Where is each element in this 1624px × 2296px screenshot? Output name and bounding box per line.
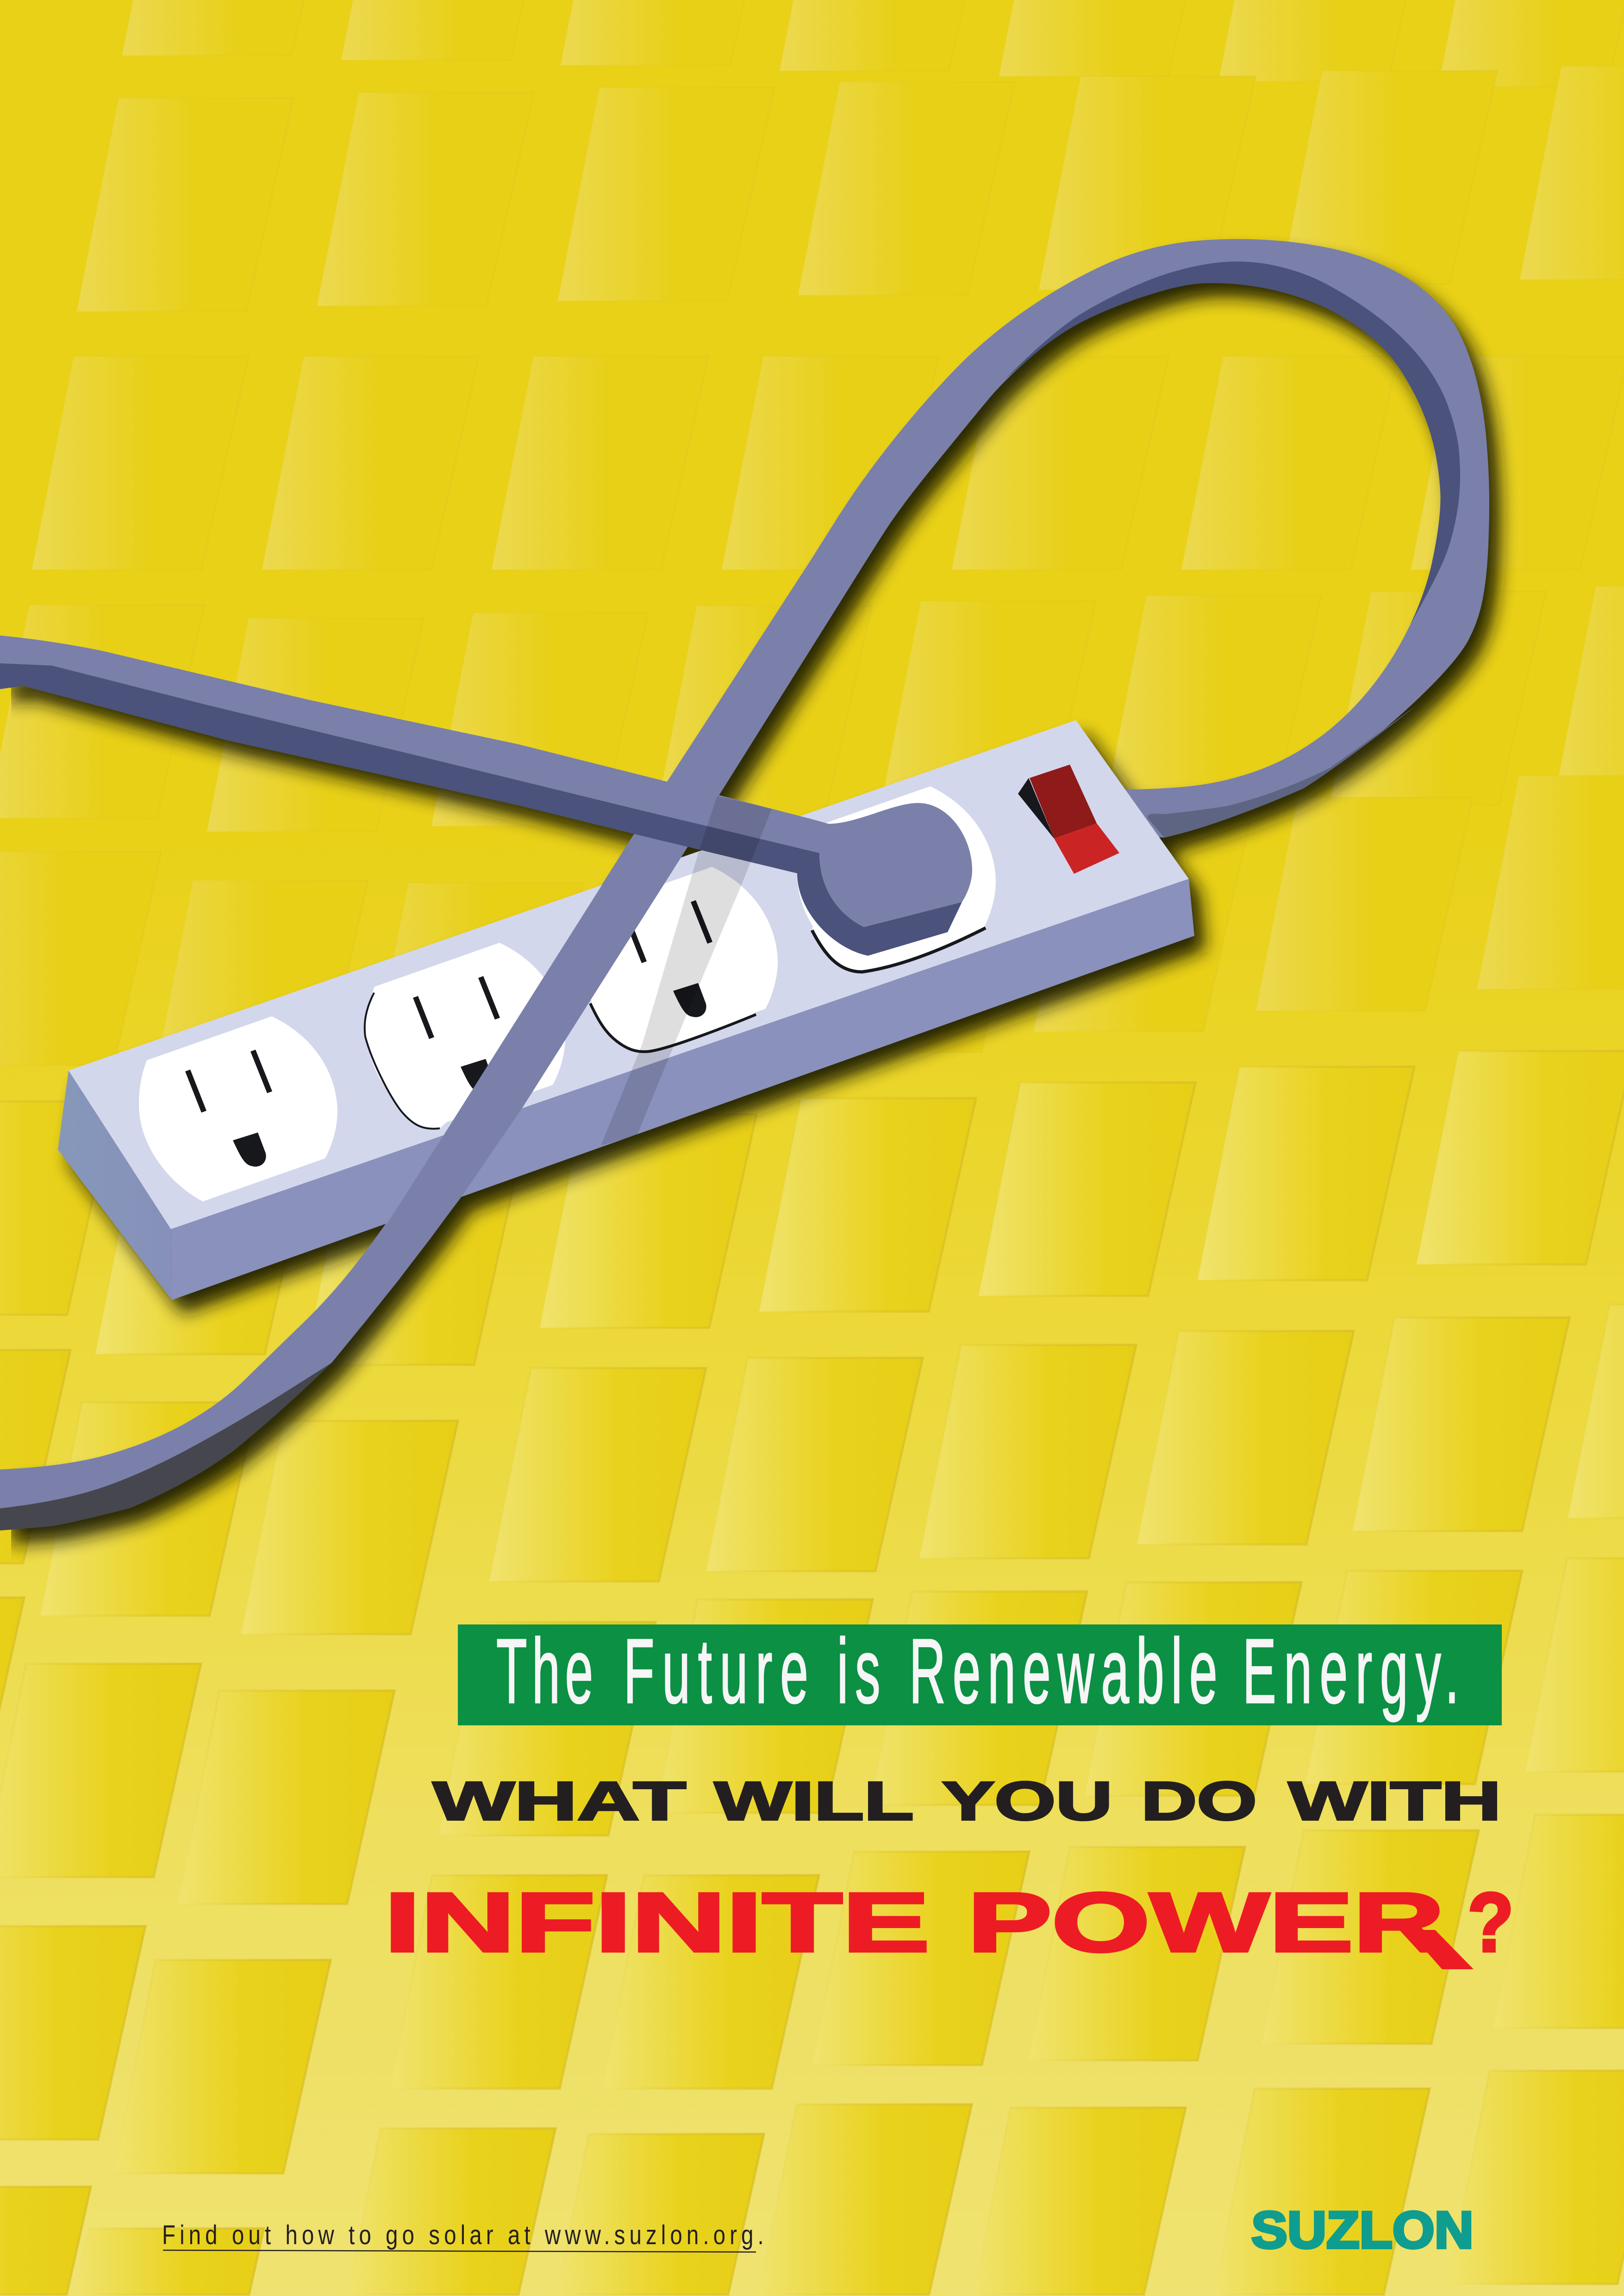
headline line two	[384, 1876, 1514, 1969]
strip left face	[58, 1070, 172, 1300]
outlet 3 outline	[590, 972, 756, 1052]
headline line one: WHAT	[433, 1771, 686, 1832]
drop shadow of cord and power strip	[11, 253, 1500, 1544]
footer call to action: Find out how to go solar at www.suzlon.org.	[162, 2221, 764, 2250]
tagline banner: is	[837, 1619, 881, 1722]
headline line two: ?	[1468, 1876, 1514, 1969]
rocker switch	[1018, 765, 1119, 874]
plug and plug cord	[0, 635, 972, 956]
headline line one: DO	[1141, 1771, 1257, 1832]
tagline banner: Energy.	[1243, 1619, 1459, 1722]
Suzlon logo: SUZLON	[1251, 2201, 1474, 2259]
headline line one: YOU	[942, 1771, 1112, 1832]
strip top face	[69, 720, 1189, 1229]
cord strand crossing over the strip	[259, 782, 720, 1370]
outlet 2 outline	[365, 993, 509, 1129]
outlet 1	[139, 1016, 337, 1201]
translucent cord reflection strip	[601, 796, 772, 1145]
infinity shaped power cord: loop	[0, 239, 1489, 1531]
tagline banner: Renewable	[909, 1619, 1218, 1722]
outlet 3	[579, 867, 778, 1052]
headline line one: WILL	[714, 1771, 914, 1832]
headline line one: WITH	[1288, 1771, 1501, 1832]
headline line one	[433, 1771, 1501, 1832]
power strip	[58, 720, 1194, 1300]
strip front face	[171, 879, 1194, 1300]
tagline banner	[458, 1619, 1502, 1725]
tagline banner: Future	[624, 1619, 808, 1722]
tagline banner: The	[496, 1619, 593, 1722]
outlet 2	[367, 943, 565, 1128]
outlet 4	[797, 786, 996, 972]
headline line two: INFINITE	[384, 1876, 930, 1969]
headline line two: POWER	[968, 1876, 1444, 1969]
